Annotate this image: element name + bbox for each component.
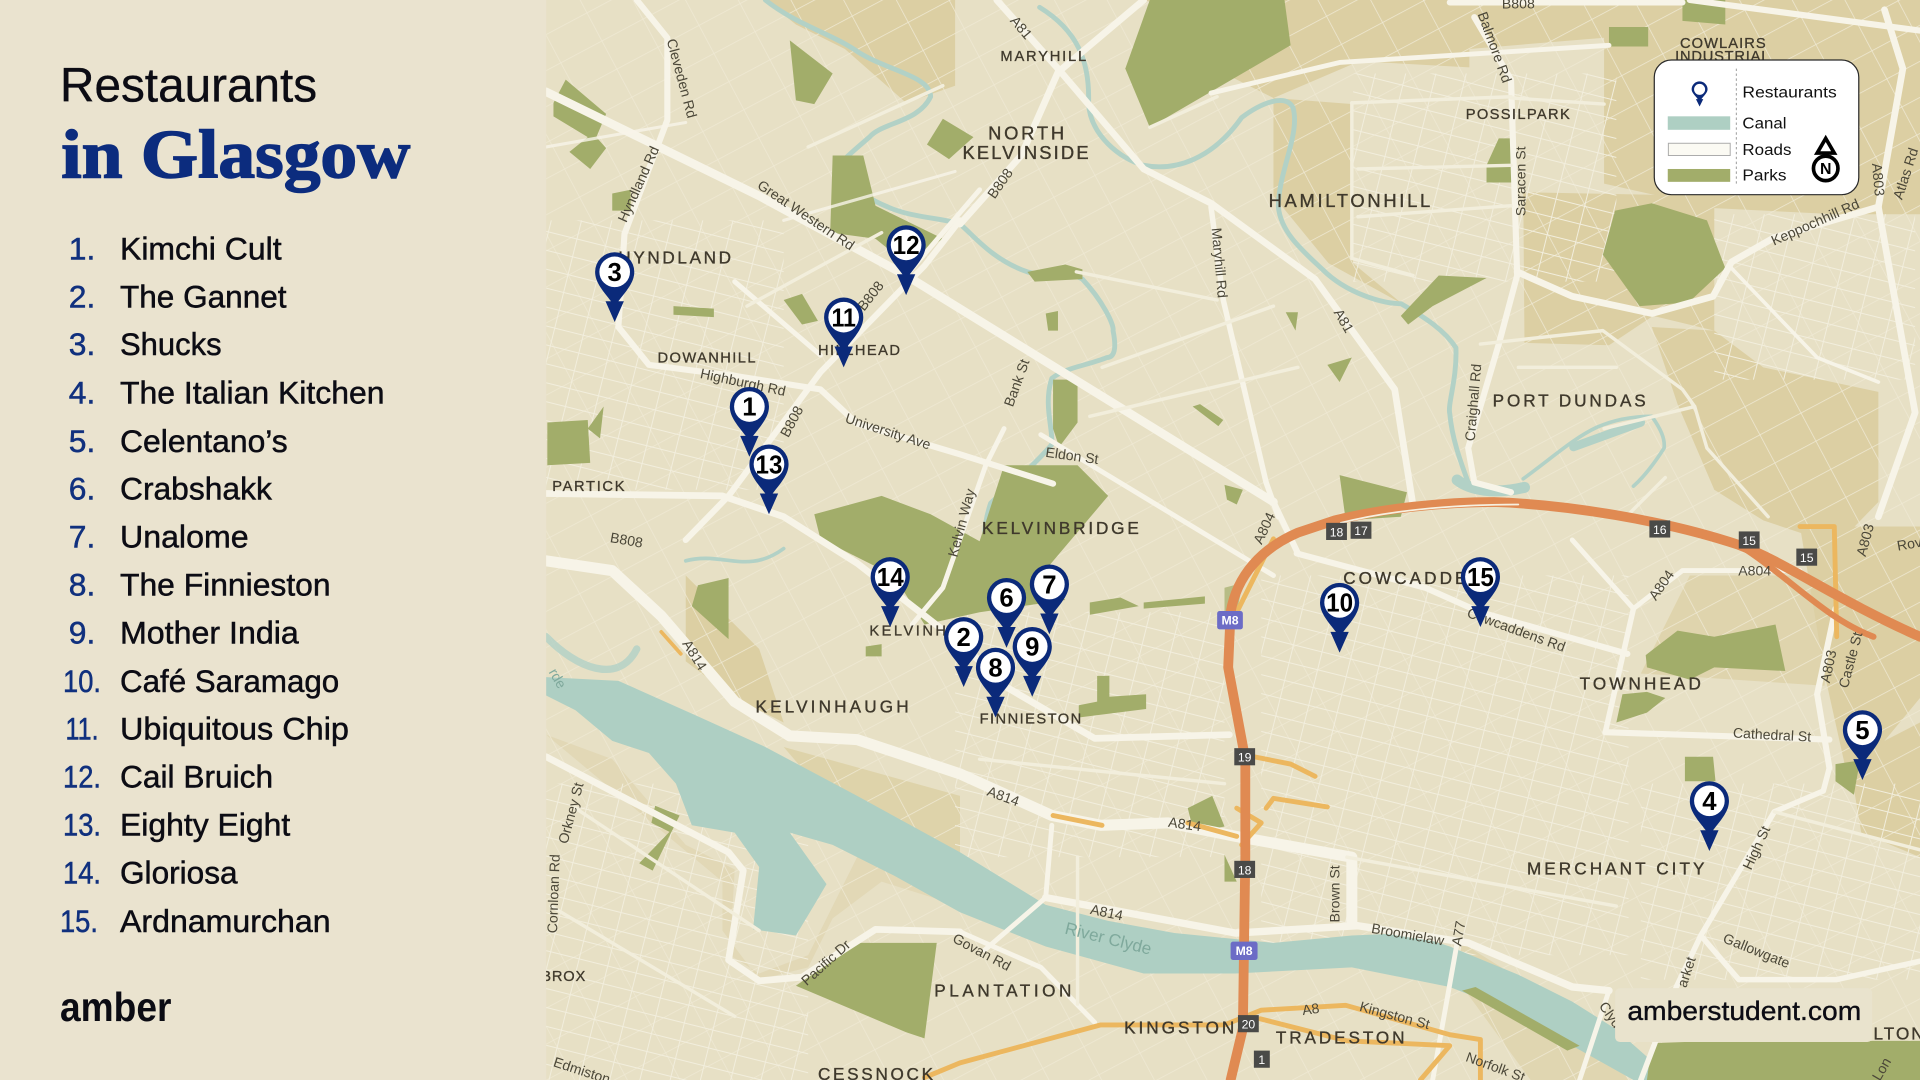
district labels: POSSILPARK (1466, 107, 1570, 123)
district labels: KELVINHAUGH (756, 697, 909, 717)
road labels: Castle St (1835, 630, 1865, 690)
M8 motorway (1228, 502, 1920, 1080)
pin 14: 14 (877, 564, 904, 592)
road labels: A804 (1645, 567, 1677, 603)
restaurant list: The Gannet (120, 278, 287, 314)
restaurant list: 8. (69, 567, 95, 603)
pin 3: 3 (608, 259, 622, 287)
north arrow (1813, 138, 1838, 181)
motorway junction badges: M8 (1222, 613, 1239, 627)
pin 13 (749, 444, 789, 514)
restaurant list: 9. (69, 614, 95, 650)
pin 4 (1690, 781, 1729, 851)
district labels: PARTICK (552, 479, 625, 495)
road labels: B808 (854, 278, 887, 314)
road labels: River Clyde (1063, 918, 1154, 959)
district labels: HAMILTONHILL (1269, 190, 1430, 211)
district labels: FINNIESTON (980, 712, 1081, 728)
restaurant list: Crabshakk (120, 471, 272, 507)
road labels: A8 (1301, 1000, 1321, 1018)
motorway junction badges: 1 (1258, 1053, 1265, 1067)
motorway junction badges: M8 (1236, 944, 1253, 958)
district labels: KELVINBRIDGE (982, 518, 1139, 538)
road labels: Bank St (1001, 357, 1033, 409)
road labels: Saracen St (1513, 146, 1529, 216)
yellow A roads (661, 527, 1837, 1080)
legend (1654, 60, 1859, 195)
motorway junction badges: 15 (1800, 551, 1814, 565)
secondary roads (551, 86, 1920, 1016)
pin 10 (1320, 583, 1359, 653)
legend: labels: Canal (1742, 116, 1787, 133)
road labels: Eldon St (1045, 444, 1100, 467)
restaurant list: Eighty Eight (120, 807, 290, 843)
restaurant list: Celentano’s (120, 423, 288, 459)
pin 9 (1013, 627, 1052, 697)
main roads (546, 0, 1920, 1080)
restaurant list: 4. (69, 374, 95, 410)
district labels: KINGSTON (1124, 1017, 1234, 1037)
district labels: KELVINHALL (869, 624, 980, 640)
road labels: A81 (1007, 13, 1036, 42)
title: Restaurants: Restaurants (60, 60, 317, 113)
road labels: Great Western Rd (755, 177, 857, 253)
north arrow: N (1820, 161, 1831, 178)
website callout (1615, 988, 1872, 1042)
pin 6 (987, 578, 1026, 648)
restaurant list: 6. (69, 471, 95, 507)
district labels: TOWNHEAD (1580, 673, 1701, 693)
road labels: Kelvin Way (945, 486, 978, 559)
road labels: Cornloan Rd (544, 854, 563, 933)
pin 6: 6 (999, 585, 1014, 613)
restaurant list: Cail Bruich (120, 758, 273, 794)
pin 9: 9 (1025, 634, 1039, 662)
road labels: A814 (679, 637, 710, 673)
road labels: Cowcaddens Rd (1465, 604, 1568, 655)
road labels: Keppochhill Rd (1769, 195, 1862, 249)
district labels: IBROX (536, 969, 586, 985)
restaurant list: 13. (63, 807, 101, 843)
restaurant list: 12. (63, 758, 101, 794)
pin 8 (976, 648, 1015, 718)
district labels: COWCADDENS (1343, 568, 1496, 588)
pin 12: 12 (893, 232, 920, 260)
minor street grid (546, 0, 1920, 1080)
restaurant list: Gloriosa (120, 854, 238, 890)
restaurant list: 5. (69, 423, 95, 459)
motorway junction badges: 20 (1242, 1018, 1255, 1032)
river clyde and docks (546, 677, 1690, 1080)
road labels: rde (546, 666, 570, 691)
restaurant list: 3. (69, 326, 95, 362)
road labels: A804 (1738, 563, 1771, 579)
pin 13: 13 (756, 451, 782, 479)
road labels: B808 (777, 403, 806, 440)
restaurant list: Kimchi Cult (120, 231, 282, 267)
restaurant list: 11. (66, 711, 99, 747)
road labels: Gallowgate (1721, 930, 1792, 971)
motorway junction badges: 15 (1742, 534, 1756, 548)
restaurant list: Shucks (120, 326, 222, 362)
road labels: Highburgh Rd (699, 365, 787, 399)
road labels: Cleveden Rd (664, 37, 700, 120)
legend: canal swatch (1668, 116, 1730, 130)
pin 11 (824, 298, 863, 367)
legend: labels: Restaurants (1742, 84, 1837, 101)
road labels: Clyd (1596, 999, 1625, 1031)
legend: labels (1742, 84, 1837, 185)
motorway junction badges: 17 (1354, 524, 1368, 538)
pin 14 (871, 557, 910, 627)
road labels: B808 (609, 529, 644, 551)
tan land areas (546, 0, 1920, 1080)
road labels: arket (1674, 954, 1699, 989)
pin 5 (1843, 710, 1882, 780)
restaurant list: The Italian Kitchen (120, 374, 384, 410)
road labels: Balmore Rd (1475, 10, 1515, 85)
road labels: A81 (1331, 306, 1357, 336)
pin 7 (1030, 564, 1069, 634)
road labels: B808 (984, 165, 1016, 201)
district labels: COWLAIRS (1680, 36, 1766, 52)
restaurant list: 14. (63, 854, 101, 890)
road labels: Hyndland Rd (614, 144, 662, 225)
district labels: DOWANHILL (658, 350, 756, 366)
road labels: A77 (1448, 920, 1468, 947)
road labels: Maryhill Rd (1209, 227, 1231, 299)
road labels: Kingston St (1358, 998, 1432, 1032)
restaurant list (60, 231, 384, 939)
road labels (544, 0, 1920, 1080)
road labels: A814 (1167, 814, 1202, 834)
road labels: A803 (1817, 648, 1839, 684)
legend: restaurant pin icon (1692, 81, 1708, 107)
legend: labels: Parks (1742, 168, 1787, 185)
pin 1 (730, 387, 769, 457)
parks (547, 0, 1920, 1080)
restaurant list: 2. (69, 278, 95, 314)
restaurant list: The Finnieston (120, 567, 331, 603)
road labels: A803 (1853, 522, 1877, 558)
map land base (546, 0, 1920, 1080)
road labels: Craighall Rd (1462, 363, 1484, 442)
district labels: MERCHANT CITY (1527, 858, 1705, 878)
pin 1: 1 (742, 394, 757, 422)
motorway junction badges (1217, 520, 1817, 1068)
restaurant list: Café Saramago (120, 663, 339, 699)
restaurant list: 1. (69, 231, 95, 267)
road labels: A814 (1089, 901, 1125, 924)
logo: amber: amber (60, 984, 172, 1030)
road labels: A803 (1869, 162, 1888, 197)
road labels: Govan Rd (950, 930, 1014, 974)
district labels: PORT DUNDAS (1493, 391, 1646, 411)
pin 15 (1461, 557, 1500, 627)
pin 7: 7 (1042, 571, 1057, 599)
district labels: PLANTATION (934, 981, 1071, 1001)
restaurant list: Ardnamurchan (120, 903, 331, 939)
district labels: MARYHILL (1000, 49, 1086, 65)
road labels: Broomielaw (1370, 920, 1446, 949)
road labels: Pacific Dr (798, 936, 854, 989)
road labels: High St (1739, 823, 1773, 872)
restaurant list: 7. (69, 518, 95, 554)
pin 2: 2 (957, 624, 971, 652)
district labels: TRADESTON (1276, 1027, 1404, 1047)
legend: parks swatch (1668, 169, 1730, 182)
pin 10: 10 (1326, 590, 1353, 618)
pin 3 (595, 252, 634, 322)
road labels: Brown St (1327, 865, 1343, 922)
road labels: A814 (985, 783, 1022, 809)
title: in Glasgow: in Glasgow (61, 117, 411, 193)
map (536, 0, 1920, 1080)
district labels: KELVINSIDE (962, 142, 1089, 163)
restaurant list: Ubiquitous Chip (120, 711, 349, 747)
pin 2 (944, 617, 983, 687)
road labels: A804 (1250, 510, 1278, 546)
website callout: amberstudent.com (1627, 996, 1861, 1026)
pin 8: 8 (988, 655, 1003, 683)
district labels: HYNDLAND (618, 247, 731, 267)
road labels: Cathedral St (1733, 725, 1812, 745)
pin 11: 11 (831, 304, 856, 332)
pin 12 (887, 225, 926, 295)
district labels: NORTH (988, 123, 1064, 144)
motorway junction badges: 19 (1238, 751, 1252, 765)
legend: labels: Roads (1742, 142, 1791, 159)
road labels: Orkney St (555, 781, 587, 845)
pin 5: 5 (1855, 717, 1870, 745)
restaurant list: 10. (63, 663, 101, 699)
district labels: HILLHEAD (818, 343, 900, 359)
restaurant list: 15. (60, 903, 98, 939)
motorway junction badges: 18 (1238, 863, 1252, 877)
restaurant list: Unalome (120, 518, 249, 554)
river kelvin and canals (546, 0, 1664, 669)
pin 4: 4 (1702, 788, 1717, 816)
district labels: INDUSTRIAL (1675, 49, 1769, 65)
motorway junction badges: 18 (1330, 525, 1344, 539)
district labels (536, 36, 1920, 1080)
pin 15: 15 (1467, 564, 1494, 592)
road labels: University Ave (843, 410, 933, 453)
panel: left sidebar background (0, 0, 546, 1080)
restaurant list: Mother India (120, 614, 299, 650)
motorway junction badges: 16 (1653, 523, 1667, 537)
legend: roads swatch (1668, 143, 1730, 156)
